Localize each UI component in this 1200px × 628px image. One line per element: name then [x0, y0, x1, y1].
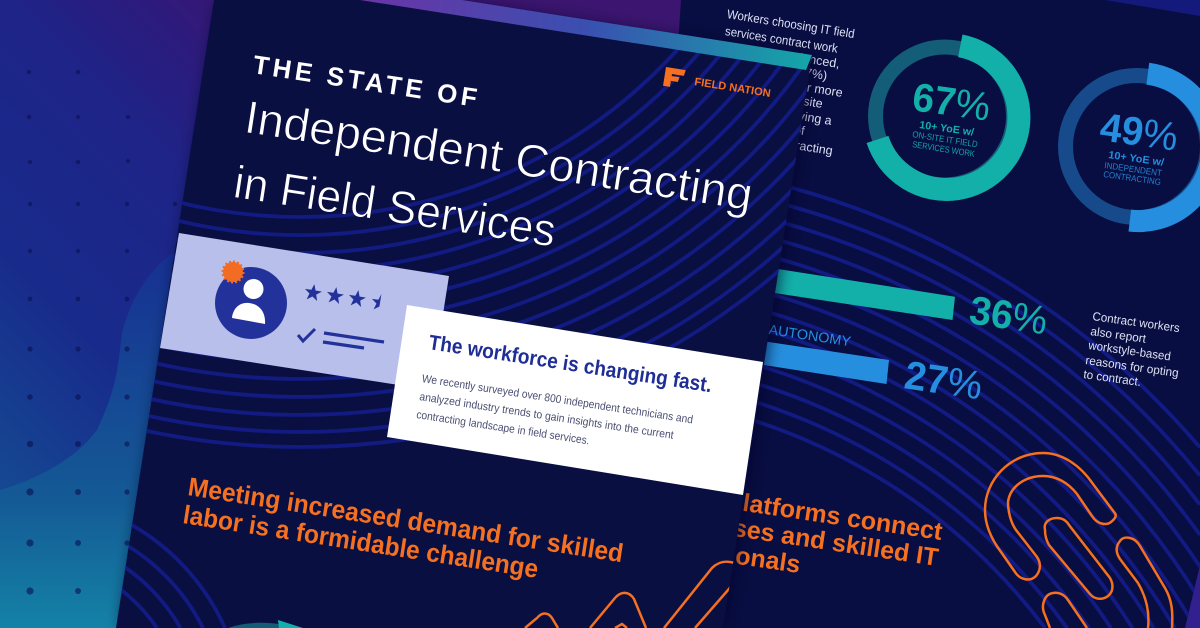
text block: workers choosing IT field services: services contract work — [724, 24, 839, 56]
panel: profile card — [160, 233, 449, 390]
donut chart: 49 percent — [1066, 74, 1200, 221]
panel: workforce card — [387, 305, 763, 495]
donut chart: 67 percent: SERVICES WORK — [912, 139, 976, 159]
icon: orange paperclip links — [985, 453, 1172, 628]
text block: workers choosing IT field services: or more — [799, 79, 844, 100]
text block: workers choosing IT field services: experienced, — [768, 46, 841, 71]
donut chart: 67 percent — [876, 46, 1019, 189]
heading: platforms connect: platforms connect — [726, 487, 945, 546]
text block: contract workers: to contract. — [1083, 367, 1142, 389]
heading: platforms connect: businesses and skilled IT — [638, 500, 940, 572]
text block: workers choosing IT field services: on-site — [784, 91, 824, 111]
donut chart: 67 percent: 10+ YoE w/ — [919, 119, 975, 139]
text block: contract workers: reasons for opting — [1085, 353, 1180, 380]
donut chart: 67 percent: 67% — [910, 75, 993, 130]
text block: contract workers: Contract workers — [1092, 309, 1181, 335]
title: Independent Contracting — [241, 90, 756, 220]
heading: meeting increased demand: Meeting increased demand for skilled — [186, 471, 625, 568]
bar chart: workstyle reasons: 27% — [902, 353, 985, 408]
icon: partial teal donut — [228, 620, 303, 628]
heading: meeting increased demand: labor is a formidable challenge — [181, 499, 540, 584]
icon: checkmark with lines — [298, 329, 384, 348]
heading: platforms connect: professionals — [637, 527, 802, 579]
text block: workers choosing IT field services: contracting — [771, 135, 834, 158]
donut chart: 49 percent: 10+ YoE w/ — [1108, 149, 1165, 169]
title: in Field Services — [230, 155, 560, 257]
logo: Field Nation — [663, 67, 772, 100]
text block: workers choosing IT field services: Workers choosing IT field — [726, 7, 856, 41]
text block: survey intro: analyzed industry trends to gain insights into the current — [419, 391, 675, 442]
shadow of front document — [119, 2, 815, 626]
text block: contract workers: workstyle-based — [1087, 338, 1172, 364]
title: THE STATE OF — [251, 49, 479, 113]
text block: contract workers — [1083, 309, 1181, 389]
bar chart: workstyle reasons — [751, 267, 1050, 408]
donut chart: 49 percent: INDEPENDENT — [1104, 160, 1163, 178]
donut chart: 49 percent: CONTRACTING — [1103, 169, 1162, 187]
donut chart: 49 percent: 49% — [1097, 105, 1181, 160]
background dot grid — [26, 70, 177, 595]
bar chart: workstyle reasons: 36% — [967, 288, 1050, 343]
text block: contract workers: also report — [1090, 324, 1148, 346]
bar chart: workstyle reasons: AUTONOMY — [768, 321, 853, 349]
donut chart: 67 percent: ON-SITE IT FIELD — [912, 129, 978, 149]
text block: workers choosing IT field services — [724, 7, 856, 158]
top gradient bar — [360, 0, 812, 70]
icon: technician avatar — [215, 262, 287, 339]
chart: orange mountain line — [525, 562, 735, 628]
heading: workforce is changing fast: The workforce is changing fast. — [427, 331, 713, 397]
text block: survey intro: We recently surveyed over 800 independent technicians and — [421, 373, 694, 426]
text block: survey intro: contracting landscape in field services. — [416, 409, 590, 447]
text block: workers choosing IT field services: (67%) — [793, 64, 828, 83]
logo: Field Nation: FIELD NATION — [694, 76, 772, 100]
text block: workers choosing IT field services: of — [793, 123, 806, 138]
title — [230, 49, 756, 257]
panel: back document — [637, 0, 1200, 628]
text block: workers choosing IT field services: having a — [784, 107, 833, 128]
icon: star rating — [303, 283, 381, 310]
panel: front document — [100, 0, 830, 628]
